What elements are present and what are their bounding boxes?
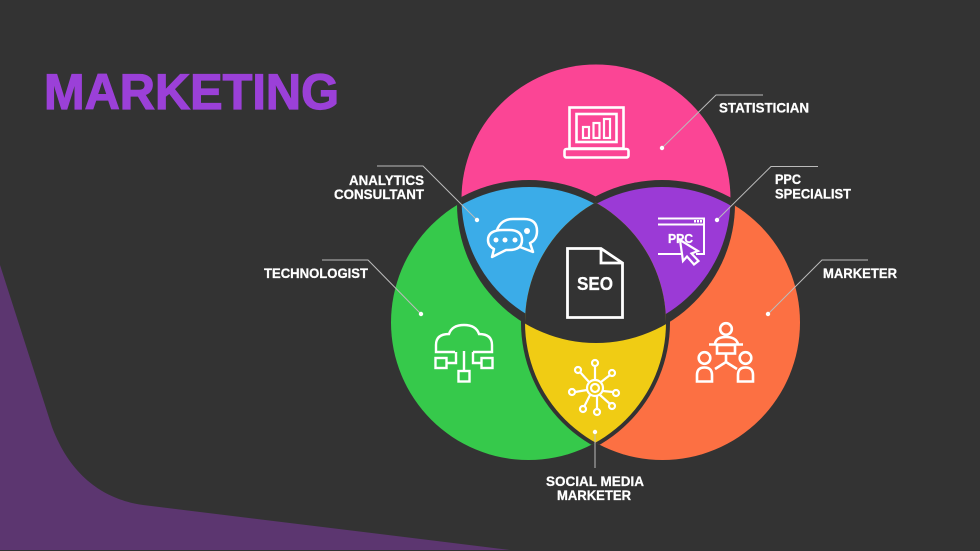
background purple shape [0,265,510,550]
segment: ppc specialist purple [597,187,730,314]
title: MARKETING [44,64,339,120]
segment: statistician pink [462,64,730,334]
callout: analytics consultant: ANALYTICS [349,173,424,188]
callout: technologist: TECHNOLOGIST [264,266,369,281]
venn diagram [386,64,805,466]
callout: ppc specialist: SPECIALIST [775,186,852,202]
icon: team with laptop [697,323,753,382]
segment: seo center [525,202,666,343]
icon: ppc browser window: PPC [668,231,694,246]
icon: seo document [568,248,622,318]
callout: analytics consultant [334,166,479,222]
icon: social network hub [569,360,619,415]
icon: chat bubbles [488,219,537,257]
segment: technologist green [391,185,666,460]
callout: technologist [264,260,423,316]
callout: social media marketer: MARKETER [557,488,631,503]
segment: social media marketer yellow [525,202,666,442]
icon: cloud network [436,325,492,382]
callout: statistician: STATISTICIAN [719,100,809,116]
callout: marketer [766,260,897,316]
icon: seo document: SEO [577,274,613,294]
callout: ppc specialist [715,166,852,222]
callout: marketer: MARKETER [823,266,897,281]
callout: analytics consultant: CONSULTANT [334,187,425,202]
segment: marketer orange [525,185,800,460]
callout: statistician [660,95,809,150]
icon: ppc browser window [658,218,704,264]
callout: ppc specialist: PPC [775,172,801,187]
callout: social media marketer [546,430,644,503]
icon: laptop chart [564,108,628,158]
segment: analytics consultant blue [462,187,594,314]
callout: social media marketer: SOCIAL MEDIA [546,474,644,489]
